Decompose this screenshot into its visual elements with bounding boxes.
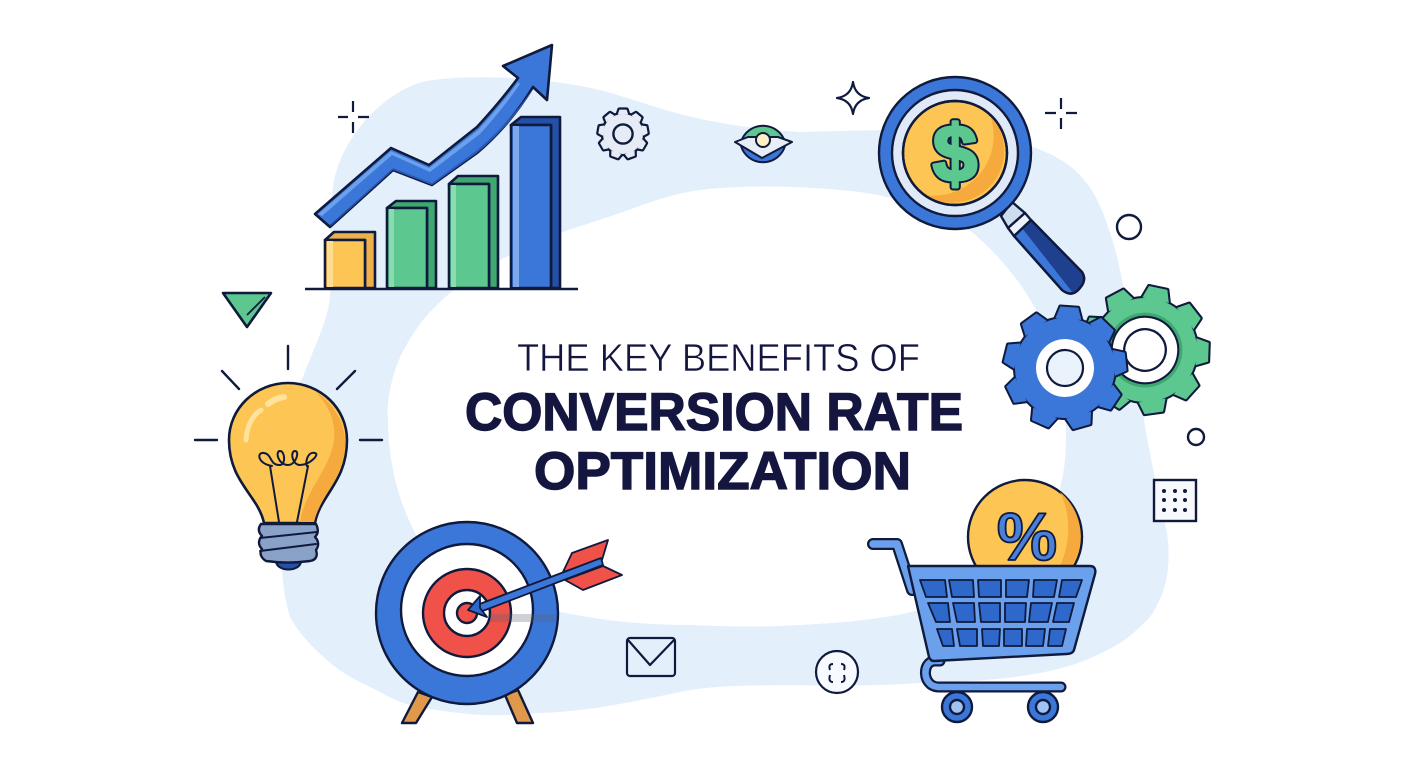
growth arrow [315, 45, 552, 227]
bulb filament [259, 451, 316, 522]
green gear [1068, 274, 1222, 426]
icon: target with arrow [376, 522, 622, 723]
cart wheel left [942, 692, 972, 722]
bar: blue [511, 117, 560, 288]
target inner white [444, 590, 490, 636]
icon: envelope [627, 638, 675, 676]
cart lower frame [925, 661, 1061, 687]
sparkle top right [1045, 98, 1077, 129]
magnifier ring [879, 77, 1031, 229]
chart baseline [305, 288, 578, 290]
badge wing [735, 137, 792, 158]
title line 2: CONVERSION RATE [465, 383, 963, 442]
target legs [402, 690, 533, 723]
icon: dot grid box [1154, 480, 1196, 521]
sparkle top left [338, 101, 369, 133]
dollar coin [903, 101, 1007, 205]
badge dot [756, 133, 770, 147]
cart handle [873, 544, 912, 590]
cart basket [908, 566, 1095, 661]
icon: magnifying glass with dollar coin [879, 77, 1084, 294]
icon: small gear [598, 110, 648, 159]
bar: green short [387, 201, 436, 288]
target red ring [423, 569, 511, 657]
icon: gears [999, 274, 1222, 434]
title [465, 337, 963, 501]
cart wheel right [1028, 692, 1058, 722]
dollar coin: $ [933, 109, 977, 198]
bulb rays [195, 346, 382, 440]
blue gear [999, 303, 1131, 434]
bar: yellow [325, 232, 375, 288]
star sparkle [837, 82, 869, 114]
target bullseye [457, 603, 477, 623]
percent coin: % [997, 499, 1057, 575]
target outer ring [376, 522, 558, 704]
cart handle fill [873, 544, 912, 590]
arrow shadow [490, 614, 555, 622]
dart arrow [468, 540, 622, 617]
icon: triangle [223, 293, 271, 327]
bar: green tall [449, 176, 498, 288]
cart grid [920, 580, 1082, 646]
icon: light bulb [195, 346, 382, 570]
magnifier glass [892, 90, 1018, 216]
magnifier handle [1001, 202, 1084, 294]
title line 3: OPTIMIZATION [534, 442, 911, 501]
circle decoration lower [1188, 429, 1204, 445]
title line 1: THE KEY BENEFITS OF [517, 337, 920, 380]
bulb screw base [259, 524, 318, 570]
icon: growth bar chart with arrow [305, 45, 578, 289]
percent coin [966, 478, 1084, 565]
icon: eye badge [735, 126, 792, 162]
badge dome blue [741, 146, 785, 162]
circle decoration upper [1117, 215, 1141, 239]
target white ring [401, 544, 533, 676]
icon: shopping cart with percent coin [873, 480, 1095, 722]
badge dome green [741, 126, 785, 142]
background blob [271, 77, 1169, 715]
bulb glass [229, 383, 347, 523]
dollar coin: $ [933, 109, 977, 198]
icon: circle with brackets [816, 651, 858, 693]
